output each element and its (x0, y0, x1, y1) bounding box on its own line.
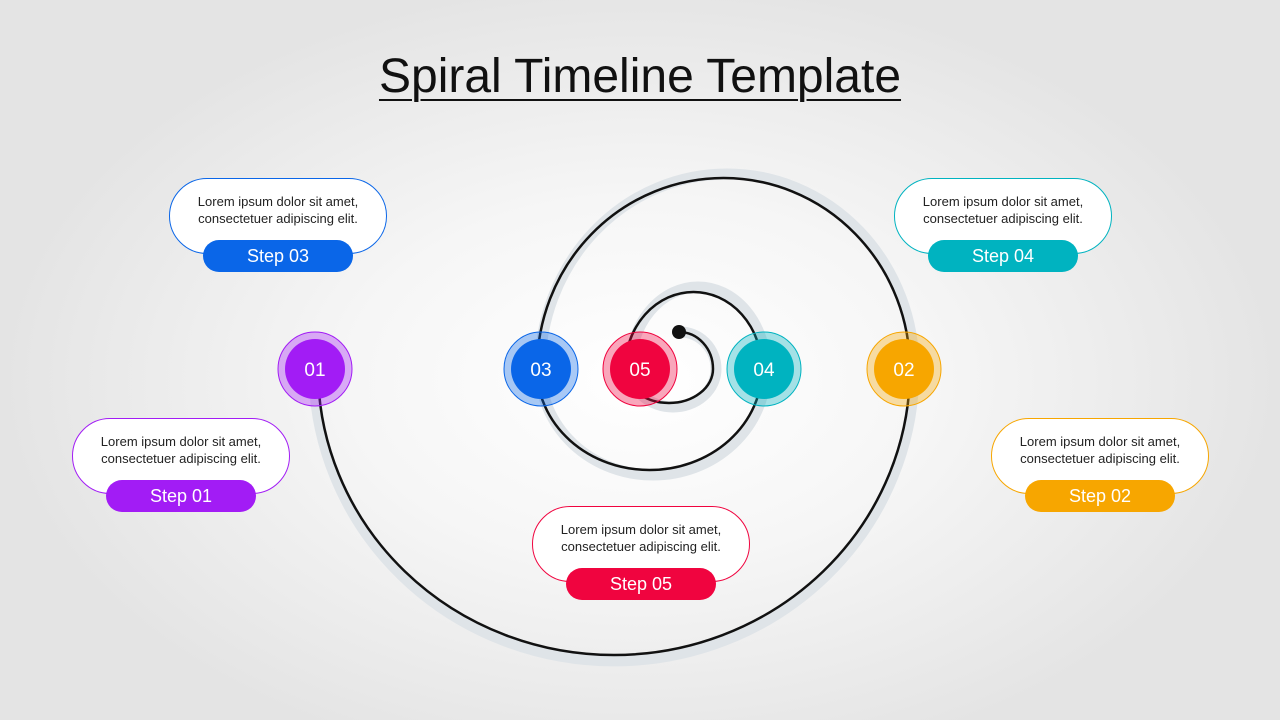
spiral end dot (672, 325, 686, 339)
card: step 03: Step 03 (247, 246, 309, 266)
card: step 01: consectetuer adipiscing elit. (101, 451, 261, 466)
card: step 04: Step 04 (972, 246, 1034, 266)
card: step 03: consectetuer adipiscing elit. (198, 211, 358, 226)
marker 03: 03 (530, 360, 552, 381)
card: step 04 (894, 178, 1112, 272)
marker 01: 01 (304, 360, 326, 381)
card: step 02: consectetuer adipiscing elit. (1020, 451, 1180, 466)
card: step 01: Lorem ipsum dolor sit amet, (101, 434, 261, 449)
marker 01 (278, 332, 352, 406)
card: step 01: Step 01 (150, 486, 212, 506)
marker 05 (603, 332, 677, 406)
card: step 05 (532, 506, 750, 600)
marker 02: 02 (893, 360, 915, 381)
marker 04 (727, 332, 801, 406)
card: step 02: Step 02 (1069, 486, 1131, 506)
card: step 05: Step 05 (610, 574, 672, 594)
card: step 03 (169, 178, 387, 272)
card: step 01 (72, 418, 290, 512)
card: step 03: Lorem ipsum dolor sit amet, (198, 194, 358, 209)
card: step 04: Lorem ipsum dolor sit amet, (923, 194, 1083, 209)
card: step 05: consectetuer adipiscing elit. (561, 539, 721, 554)
marker 03 (504, 332, 578, 406)
marker 04: 04 (753, 360, 775, 381)
card: step 04: consectetuer adipiscing elit. (923, 211, 1083, 226)
marker 02 (867, 332, 941, 406)
card: step 05: Lorem ipsum dolor sit amet, (561, 522, 721, 537)
title: Spiral Timeline Template (379, 50, 901, 103)
card: step 02 (991, 418, 1209, 512)
marker 05: 05 (629, 360, 651, 381)
card: step 02: Lorem ipsum dolor sit amet, (1020, 434, 1180, 449)
